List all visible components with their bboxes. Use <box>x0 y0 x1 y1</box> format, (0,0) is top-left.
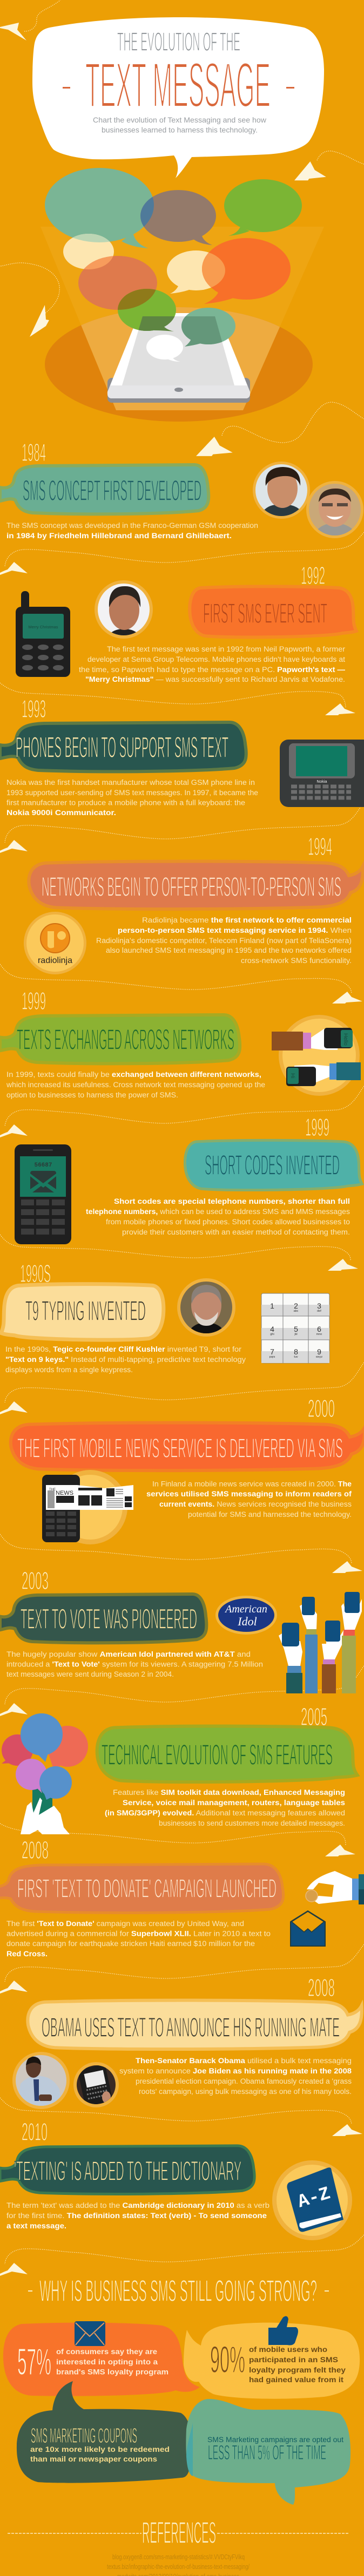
section: 2008 text to donate: 2008 <box>22 1836 49 1864</box>
body text: "Merry Christmas" — was successfully sent to Richard Jarvis at Vodafone. <box>85 675 345 683</box>
body text <box>119 2057 352 2096</box>
icon: T9 keypad: 8 <box>294 1347 298 1356</box>
heading bubble <box>29 862 363 909</box>
heading bubble <box>190 586 356 637</box>
photo: Blackberry message <box>73 2062 119 2107</box>
section: 2005: 2005 <box>301 1703 327 1731</box>
speech bubble cluster <box>45 168 302 362</box>
heading bubble <box>11 1423 364 1470</box>
icon: T9 keypad: 2 <box>294 1301 298 1310</box>
body text: provide their customers with an easier method of contacting them. <box>122 1228 350 1236</box>
logo: American Idol: Idol <box>237 1615 257 1628</box>
body text <box>6 1920 271 1958</box>
body text <box>6 778 258 817</box>
body text <box>6 2201 269 2230</box>
icon: A-Z dictionary: A-Z <box>295 2184 333 2213</box>
body text <box>86 1197 350 1236</box>
section: 2000: 2000 <box>308 1394 335 1422</box>
section: 2003: 2003 <box>22 1567 49 1595</box>
logo: American Idol: American <box>224 1603 267 1615</box>
icon: T9 keypad: 6 <box>317 1325 321 1333</box>
body text: In Finland a mobile news service was created in 2000. The <box>152 1480 352 1488</box>
body text: The first 'Text to Donate' campaign was created by United Way, and <box>6 1920 244 1928</box>
section: 1999 short codes <box>15 1113 362 1244</box>
body text: The SMS concept was developed in the Franco-German GSM cooperation <box>6 521 258 530</box>
stat bubble: opt-out <box>186 2399 350 2505</box>
body text: option to businesses to harness the power of SMS. <box>6 1091 178 1099</box>
reference list: textus.biz/infographic-the-evolution-of-business-text-messaging/ <box>107 2563 250 2571</box>
body text: Nokia was the first handset manufacturer whose total GSM phone line in <box>6 778 255 787</box>
icon: T9 keypad: 1 <box>270 1301 274 1310</box>
icon: T9 keypad: 5 <box>294 1325 298 1333</box>
icon: smartphone with short code <box>15 1144 71 1244</box>
portrait: Bernard Ghillebaert <box>306 481 363 538</box>
portrait: Neil Papworth <box>95 580 153 640</box>
heading bubble <box>0 722 246 771</box>
section: 1999 short codes: 1999 <box>305 1113 329 1141</box>
logo: radiolinja <box>24 912 86 974</box>
body text: The first text message was sent in 1992 from Neil Papworth, a former <box>107 645 346 653</box>
section: 1994: 1994 <box>308 832 332 860</box>
stat bubble: 90% <box>184 2316 360 2399</box>
body text: Short codes are special telephone numbers, shorter than full <box>114 1197 350 1205</box>
logo: American Idol <box>215 1596 277 1635</box>
body text: for the first time. The definition states: Text (verb) - To send someone <box>6 2212 267 2220</box>
section: 1993 <box>0 695 364 817</box>
logo: radiolinja: radiolinja <box>38 956 72 965</box>
body text: Radiolinja's domestic competitor, Telecom Finland (now part of TeliaSonera) <box>96 937 352 945</box>
body text: developer at Sema Group Telecoms. Mobile phones didn't have keyboards at <box>87 655 345 663</box>
stat bubble: 90%: loyalty program felt they <box>249 2366 346 2374</box>
subtitle: Chart the evolution of Text Messaging and see how <box>93 116 267 124</box>
stat bubble: 57%: 57% <box>17 2341 51 2383</box>
section: 2005 <box>2 1703 358 1834</box>
body text: first manufacturer to produce a mobile phone with a full keyboard: the <box>6 799 245 806</box>
stat bubble: opt-out: SMS Marketing campaigns are opted out <box>207 2436 343 2444</box>
icon: smartphone with short code: 56687 <box>34 1162 52 1169</box>
title bubble: businesses learned to harness this technology. <box>102 125 258 134</box>
stat bubble: 57% <box>3 2321 200 2396</box>
icon: T9 keypad: 4 <box>270 1325 274 1333</box>
stat bubble: 57%: of consumers say they are <box>56 2348 158 2356</box>
stat bubble: 57%: brand's SMS loyalty program <box>56 2368 168 2376</box>
body text: text messages were sent during Season 2 in 2004. <box>6 1670 174 1678</box>
section: why business SMS <box>3 2274 360 2505</box>
icon: hand dropping coin <box>306 1871 364 1904</box>
icon: T9 keypad: 3 <box>317 1301 321 1310</box>
body text: displays words from a single keypress. <box>5 1366 133 1374</box>
stat bubble: coupons: than mail or newspaper coupons <box>30 2455 157 2463</box>
illustration: raised hands with phones <box>279 1592 362 1693</box>
body text: Nokia 9000i Communicator. <box>6 809 116 817</box>
heading bubble <box>97 1726 358 1782</box>
body text: Features like SIM toolkit data download, Enhanced Messaging <box>113 1788 345 1797</box>
body text: The term 'text' was added to the Cambridge dictionary in 2010 as a verb <box>6 2201 269 2209</box>
icon: T9 keypad: tuv <box>294 1355 298 1359</box>
hero illustration <box>41 168 324 422</box>
reference list <box>107 2553 250 2576</box>
stat bubble: 90%: 90% <box>210 2338 245 2381</box>
section: 1993: 1993 <box>22 695 46 723</box>
icon: T9 keypad <box>261 1293 329 1363</box>
body text: donate campaign for earthquake stricken Haiti earned $10 million for the <box>6 1940 255 1948</box>
section: 1990s T9: 1990S <box>20 1259 51 1287</box>
heading bubble <box>0 465 208 514</box>
body text: In the 1990s, Tegic co-founder Cliff Kushler invented T9, short for <box>5 1345 242 1353</box>
body text: Radiolinja became the first network to offer commercial <box>142 916 352 924</box>
section: 2010 <box>0 2118 352 2240</box>
photo: Obama on a plane <box>12 2052 70 2109</box>
icon: T9 keypad: abc <box>294 1310 299 1313</box>
heading bubble <box>0 1015 240 1063</box>
body text <box>6 1650 263 1678</box>
section: 1994 <box>24 832 363 974</box>
icon: open envelope <box>291 1911 325 1946</box>
body text: system to announce Joe Biden as his running mate in the 2008 <box>119 2067 352 2075</box>
body text <box>146 1480 352 1519</box>
icon: A-Z dictionary <box>272 2160 352 2240</box>
body text: "Text on 9 keys." Instead of multi-tapping, predictive text technology <box>5 1355 246 1364</box>
section: 1984 <box>0 438 363 540</box>
heading bubble <box>185 1140 362 1190</box>
icon: envelope <box>75 2321 105 2346</box>
body text: advertised during a commercial for Superbowl XLII. Later in 2010 a text to <box>6 1929 271 1938</box>
body text: telephone numbers, which can be used to address SMS and MMS messages <box>86 1208 350 1216</box>
body text <box>79 645 346 683</box>
icon: phone with newspaper: NEWS <box>56 1490 73 1496</box>
body text: The hugely popular show American Idol partnered with AT&T and <box>6 1650 251 1658</box>
body text <box>96 916 352 965</box>
body text: Red Cross. <box>6 1950 48 1958</box>
icon: T9 keypad: mno <box>316 1333 322 1336</box>
body text: Service, voice mail management, routers, language tables <box>123 1799 345 1807</box>
body text: a text message. <box>6 2222 66 2230</box>
icon: T9 keypad: 7 <box>270 1347 274 1356</box>
icon: T9 keypad: def <box>317 1310 321 1313</box>
section: 2010: 2010 <box>22 2118 48 2146</box>
section: 1999 networks <box>0 987 361 1099</box>
section: 1990s T9 <box>1 1259 329 1374</box>
body text: businesses to send customers more detailed messages. <box>159 1819 345 1827</box>
body text: also launched SMS text messaging in 1995 and the two networks offered <box>106 946 352 954</box>
stat bubble: 90%: of mobile users who <box>249 2345 327 2354</box>
body text: services utilised SMS messaging to inform readers of <box>146 1490 352 1498</box>
illustration: phone with balloons <box>2 1713 88 1834</box>
icon: phone with newspaper <box>42 1470 133 1544</box>
stat bubble: 90%: had gained value from it <box>249 2376 344 2384</box>
icon: T9 keypad: ghi <box>270 1333 274 1336</box>
icon: Nokia communicator <box>280 740 364 807</box>
section: 2008 Obama: 2008 <box>308 1974 335 2002</box>
body text: potential for SMS and harnessed the technology. <box>188 1510 352 1519</box>
stat bubble: 57%: interested in opting into a <box>56 2358 158 2366</box>
references: REFERENCES <box>142 2516 216 2550</box>
title bubble <box>32 17 324 178</box>
icon: Nokia communicator: Nokia <box>316 779 327 784</box>
section: 1990s T9: T9 TYPING INVENTED <box>25 1296 146 1327</box>
icon: hands exchanging phones <box>272 1015 361 1096</box>
body text: person-to-person SMS text messaging service in 1994. When <box>118 926 352 934</box>
body text: introduced a 'Text to Vote' system for its viewers. A staggering 7.5 Million <box>6 1660 263 1668</box>
portrait: Cliff Kushler <box>177 1278 235 1337</box>
stat bubble: coupons: are 10x more likely to be redeemed <box>30 2445 170 2453</box>
icon: T9 keypad: wxyz <box>315 1355 322 1359</box>
section: 1999 networks: 1999 <box>22 987 46 1015</box>
body text: 1993 supported user-sending of SMS text messages. In 1997, it became the <box>6 789 258 797</box>
section: 1984: 1984 <box>22 438 46 466</box>
icon: phone with newspaper: THE <box>49 1488 56 1492</box>
body text <box>6 521 258 540</box>
heading bubble <box>0 2146 254 2194</box>
body text <box>5 1345 246 1374</box>
icon: hands exchanging phones: Hello <box>342 1033 348 1046</box>
body text <box>105 1788 345 1827</box>
body text: Then-Senator Barack Obama utilised a bulk text messaging <box>136 2057 352 2065</box>
section: 2008 text to donate <box>0 1836 364 1958</box>
reference list: blog.oxygen8.com/sms-marketing-statistics/#.VVDCtyFVikq <box>112 2553 245 2561</box>
body text: presidential election campaign. Obama famously created a 'grass <box>136 2077 352 2085</box>
body text: the time, so Papworth had to type the message on a PC. Papworth's text — <box>79 666 346 674</box>
icon: T9 keypad: jkl <box>294 1333 298 1336</box>
body text: roots' campaign, using bulk messaging as one of his many tools. <box>139 2087 352 2096</box>
icon: T9 keypad: 9 <box>317 1347 321 1356</box>
icon: T9 keypad: pqrs <box>269 1355 275 1359</box>
heading bubble <box>1 1284 164 1340</box>
body text: in 1984 by Friedhelm Hillebrand and Bernard Ghillebaert. <box>6 532 232 540</box>
section: 2003 <box>0 1567 362 1693</box>
body text <box>6 1070 265 1099</box>
heading bubble <box>0 1594 206 1643</box>
body text: current events. News services recognised the business <box>159 1500 352 1508</box>
icon: candybar phone: Merry Christmas <box>28 625 58 629</box>
stat bubble: coupons <box>17 2381 192 2483</box>
icon: candybar phone <box>16 591 70 677</box>
body text: from mobile phones or fixed phones. Short codes allowed businesses to <box>106 1218 350 1226</box>
references <box>8 2516 349 2576</box>
section: 2008 Obama <box>12 1974 362 2109</box>
icon: thumbs up <box>268 2316 298 2345</box>
stat bubble: coupons: SMS MARKETING COUPONS <box>31 2424 137 2448</box>
stat bubble: 90%: participated in an SMS <box>249 2356 338 2364</box>
heading bubble <box>0 1864 284 1913</box>
body text: cross-network SMS functionality. <box>241 957 352 965</box>
section: 1992: 1992 <box>301 561 325 589</box>
body text: In 1999, texts could finally be exchanged between different networks, <box>6 1070 261 1079</box>
icon: hands exchanging phones: Hi <box>289 1073 295 1078</box>
tablet <box>107 313 250 403</box>
section: 2000 <box>11 1394 364 1544</box>
portrait: Friedhelm Hillebrand <box>253 462 310 519</box>
section: 1992 <box>16 561 356 683</box>
body text: (in SMG/3GPP) evolved. Additional text messaging features allowed <box>105 1809 345 1817</box>
heading bubble <box>28 2001 362 2049</box>
body text: which increased its usefulness. Cross network text messaging opened up the <box>6 1081 265 1089</box>
